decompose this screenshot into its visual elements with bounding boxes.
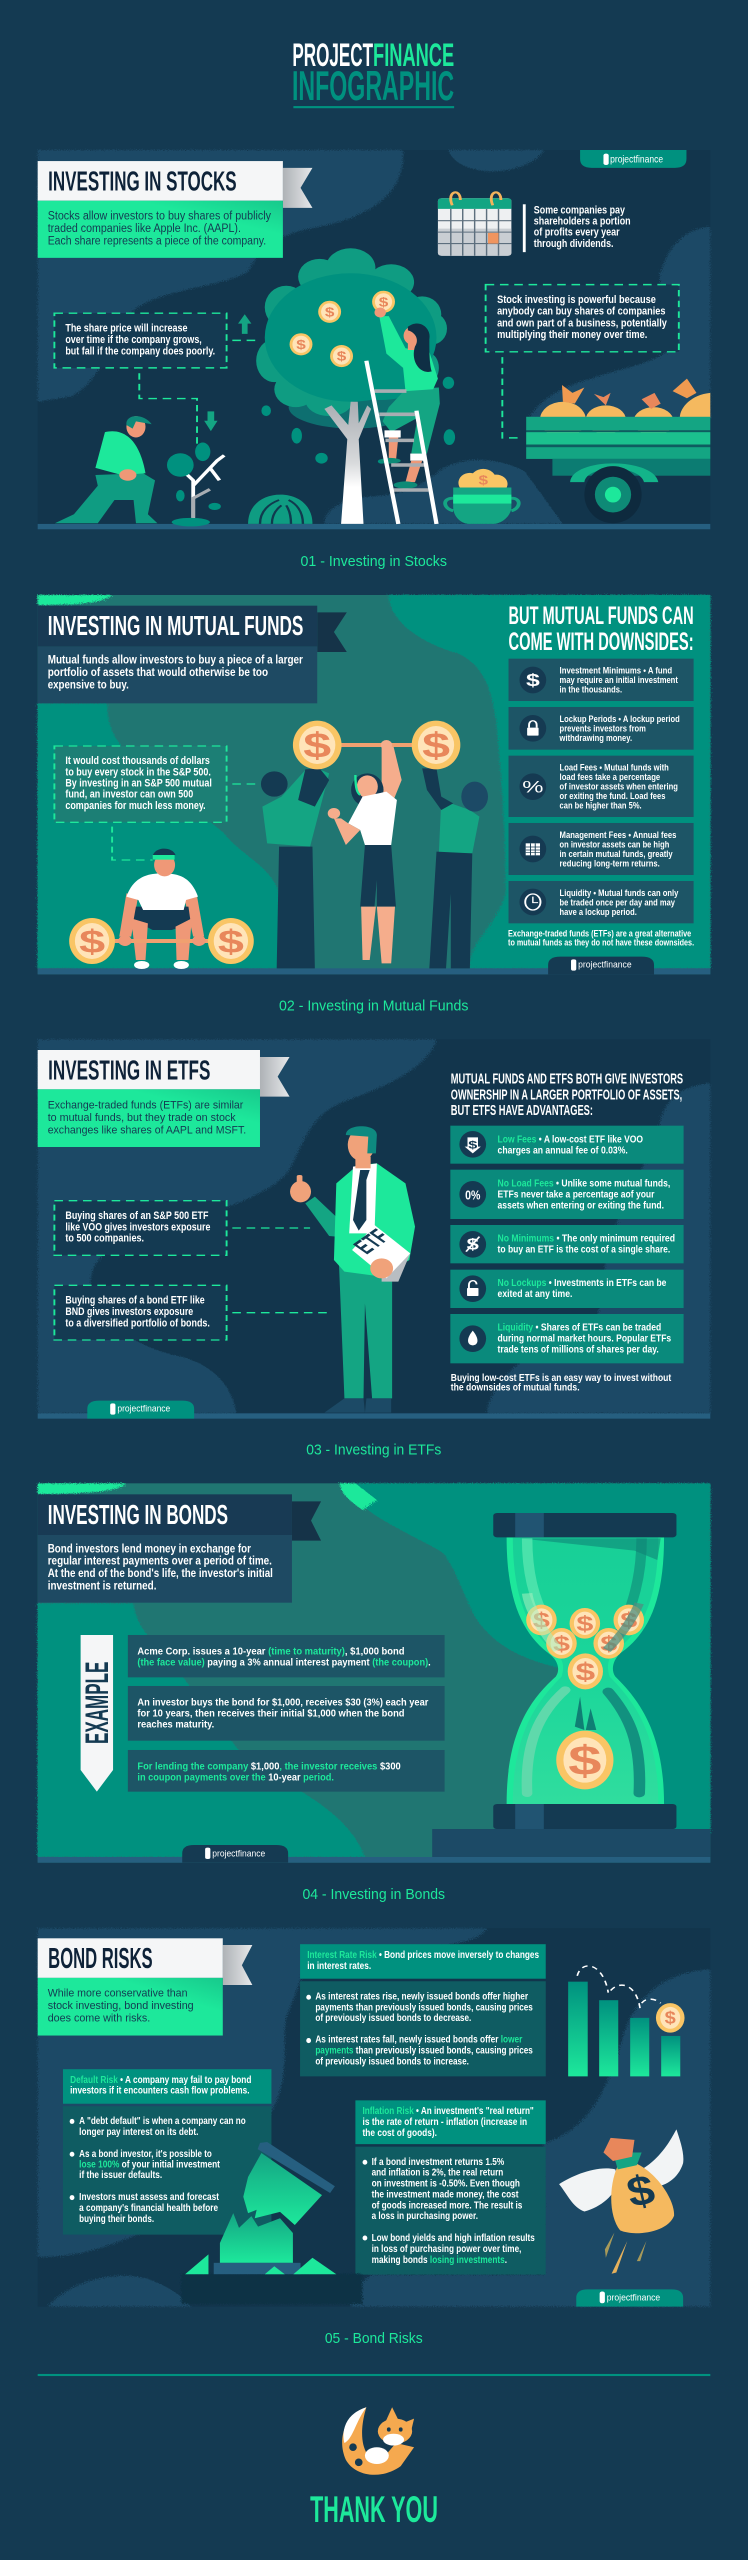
card: liquidity <box>509 881 694 923</box>
header title <box>292 38 454 109</box>
card: investment minimums: $ <box>526 671 540 690</box>
card: no lockups: exited at any time. <box>498 1287 572 1299</box>
dividends note: through dividends. <box>534 238 613 250</box>
example card 2: reaches maturity. <box>137 1718 214 1730</box>
intro text box: Exchange-traded funds (ETFs) are similar <box>48 1098 244 1111</box>
callout: cost: fund, an investor can own 500 <box>65 788 193 800</box>
weightlifter: $ <box>79 923 105 960</box>
ETF note <box>508 929 694 948</box>
intro text box: Each share represents a piece of the company. <box>48 234 266 247</box>
card: interest rate risk: As interest rates rise, newly issued bonds offer higher <box>315 1992 528 2002</box>
card: lockup periods: prevents investors from <box>560 724 646 734</box>
tree <box>256 248 447 524</box>
card: inflation risk <box>355 2100 546 2275</box>
title ribbon <box>38 161 312 208</box>
card: interest rate risk: of previously issued bonds to increase. <box>315 2057 469 2067</box>
callout: cost: It would cost thousands of dollars <box>65 754 210 766</box>
ETF folder: ETF <box>348 1225 396 1258</box>
weightlifter <box>69 849 254 969</box>
callout: share price: over time if the company grows, <box>65 334 202 345</box>
callout: S&P ETF: like VOO gives investors exposure <box>65 1221 211 1233</box>
logo tab <box>182 1845 288 1863</box>
card: management fees: on investor assets can be high <box>560 840 669 850</box>
intro text box: to mutual funds, but they trade on stock <box>48 1110 236 1123</box>
dividends note <box>523 204 631 252</box>
flying money bag <box>559 2129 683 2274</box>
card: inflation risk: Inflation Risk • An investment's "real return" <box>363 2107 534 2117</box>
card: load fees: load fees take a percentage <box>560 773 660 782</box>
title ribbon <box>38 1938 252 1985</box>
card: inflation risk: If a bond investment returns 1.5% <box>372 2157 504 2168</box>
callout: cost: to buy every stock in the S&P 500. <box>65 766 211 778</box>
card: default risk: investors if it encounters cash flow problems. <box>70 2086 250 2096</box>
card: default risk: Investors must assess and forecast <box>79 2193 219 2203</box>
caption 05: 05 - Bond Risks <box>325 2331 423 2347</box>
three people lifting: $ <box>303 727 331 765</box>
caption 02: 02 - Investing in Mutual Funds <box>279 997 469 1014</box>
three people lifting <box>261 721 488 968</box>
intro text box <box>38 201 283 258</box>
truck <box>526 417 710 523</box>
arrow up <box>238 314 251 334</box>
caption 04: 04 - Investing in Bonds <box>302 1886 445 1902</box>
coins on tree: $ <box>296 338 306 352</box>
card: investment minimums <box>509 659 694 701</box>
card: management fees: in certain mutual funds, greatly <box>560 850 673 859</box>
card: interest rate risk: As interest rates fall, newly issued bonds offer lower <box>315 2035 522 2045</box>
card: load fees: % <box>522 778 543 796</box>
example card 1 <box>128 1635 445 1677</box>
intro text box: investment is returned. <box>48 1580 156 1593</box>
card: load fees: can be higher than 5%. <box>560 801 642 811</box>
weightlifter: $ <box>218 923 244 960</box>
title ribbon <box>38 1494 321 1541</box>
example card 2 <box>128 1686 445 1741</box>
card: investment minimums: in the thousands. <box>560 685 622 695</box>
dying tree <box>167 442 224 526</box>
card: default risk <box>63 2069 271 2235</box>
example card 1: Acme Corp. issues a 10-year (time to maturity), $1,000 bond <box>137 1645 405 1657</box>
callout: S&P ETF <box>54 1201 310 1255</box>
money bags <box>540 379 710 437</box>
card: liquidity: Liquidity • Shares of ETFs can be traded <box>498 1321 661 1333</box>
card: no load fees: 0% <box>465 1188 481 1203</box>
hourglass: $ <box>568 1737 601 1784</box>
callout: S&P ETF: Buying shares of an S&P 500 ETF <box>65 1209 208 1221</box>
intro text box: exchanges like shares of AAPL and MSFT. <box>48 1123 246 1136</box>
caption 01: 01 - Investing in Stocks <box>301 553 447 569</box>
card: interest rate risk: of previously issued bonds to decrease. <box>315 2014 471 2024</box>
arrow down <box>204 411 218 431</box>
card: low fees <box>450 1126 684 1164</box>
card: inflation risk: on investment is -0.50%. Even though <box>372 2179 520 2189</box>
heading: downsides <box>509 602 694 656</box>
coins on tree <box>290 291 395 367</box>
card: no lockups <box>450 1270 684 1308</box>
caption 03: 03 - Investing in ETFs <box>306 1442 441 1458</box>
leaves <box>261 377 455 464</box>
example arrow: EXAMPLE <box>79 1662 115 1744</box>
card: inflation risk: and inflation is 2%, the real return <box>372 2168 503 2179</box>
logo tab <box>548 957 654 974</box>
bush <box>248 495 312 524</box>
dividends note: Some companies pay <box>534 204 625 216</box>
callout: S&P ETF: to 500 companies. <box>65 1232 144 1244</box>
card: no minimums: $ <box>467 1237 479 1254</box>
panel: bond risks <box>38 1928 710 2531</box>
card: default risk: a company's financial health before <box>79 2204 218 2214</box>
card: interest rate risk: payments than previously issued bonds, causing prices <box>315 2046 533 2056</box>
hourglass: $ <box>600 1632 618 1656</box>
coins on tree: $ <box>379 295 389 310</box>
intro text box: Bond investors lend money in exchange for <box>48 1543 251 1556</box>
intro text box: At the end of the bond's life, the investor's initial <box>48 1567 273 1580</box>
falling bar chart: $ <box>665 2009 676 2028</box>
example card 2: for 10 years, then receives their initial $1,000 when the bond <box>137 1707 405 1719</box>
card: no load fees <box>450 1170 684 1219</box>
logo tab <box>580 150 686 168</box>
card: investment minimums: Investment Minimums • A fund <box>560 666 672 676</box>
card: load fees: or exiting the fund. Load fees <box>560 792 665 801</box>
coins on tree: $ <box>325 305 335 320</box>
coins on tree: $ <box>337 350 347 364</box>
card: interest rate risk: in interest rates. <box>307 1962 371 1972</box>
hourglass: $ <box>533 1608 550 1633</box>
callout: powerful <box>486 285 679 438</box>
card: inflation risk: in loss of purchasing power over time, <box>372 2244 522 2255</box>
flying money bag: $ <box>622 2165 659 2217</box>
card: low fees: Low Fees • A low-cost ETF like VOO <box>498 1133 643 1145</box>
callout: bond ETF: to a diversified portfolio of bonds. <box>65 1317 210 1329</box>
example card 3: For lending the company $1,000, the investor receives $300 <box>137 1760 401 1772</box>
three people lifting: $ <box>422 727 450 765</box>
card: no lockups: No Lockups • Investments in ETFs can be <box>498 1276 666 1288</box>
callout: cost: companies for much less money. <box>65 799 206 811</box>
intro text box: portfolio of assets that would otherwise be too <box>48 666 268 679</box>
panel: mutual funds <box>38 595 710 1014</box>
heading: advantages <box>451 1070 683 1118</box>
card: default risk: A "debt default" is when a company can no <box>79 2116 246 2127</box>
card: default risk: As a bond investor, it's possible to <box>79 2149 212 2160</box>
woman on ladder <box>374 307 440 489</box>
falling bar chart <box>568 1966 685 2076</box>
example arrow <box>79 1635 115 1792</box>
callout: cost: By investing in an S&P 500 mutual <box>65 777 212 789</box>
fox mascot <box>342 2407 414 2475</box>
intro text box <box>38 1978 223 2036</box>
title ribbon: INVESTING IN ETFS <box>48 1055 210 1086</box>
card: liquidity <box>450 1314 684 1363</box>
title ribbon: INVESTING IN MUTUAL FUNDS <box>48 611 303 641</box>
callout: powerful: Stock investing is powerful because <box>497 294 656 305</box>
panel: ETFs <box>38 1039 710 1458</box>
intro text box <box>38 1535 292 1603</box>
pot of coins <box>445 469 519 524</box>
text: INFOGRAPHIC <box>292 62 454 109</box>
businessman <box>290 1126 415 1413</box>
callout: bond ETF <box>54 1285 329 1340</box>
card: low fees: charges an annual fee of 0.03%. <box>498 1144 628 1156</box>
hourglass <box>432 1513 710 1857</box>
card: inflation risk: the investment made money, the cost <box>372 2190 519 2200</box>
hourglass: $ <box>576 1612 594 1636</box>
card: lockup periods: withdrawing money. <box>559 734 632 743</box>
card: lockup periods <box>509 707 694 750</box>
ETF folder <box>348 1225 410 1282</box>
example card 1: (the face value) paying a 3% annual interest payment (the coupon). <box>137 1656 431 1668</box>
intro text box <box>38 647 317 703</box>
broken hourglass <box>181 2142 363 2304</box>
logo tab <box>87 1401 194 1419</box>
card: inflation risk: the cost of goods). <box>363 2129 437 2139</box>
panel: investing in stocks <box>38 150 710 529</box>
card: interest rate risk: Interest Rate Risk • Bond prices move inversely to changes <box>307 1951 539 1961</box>
intro text box: Stocks allow investors to buy shares of publicly <box>48 208 271 222</box>
title ribbon <box>38 606 347 652</box>
callout: share price: The share price will increase <box>65 322 187 334</box>
card: default risk: buying their bonds. <box>79 2215 154 2225</box>
text: FINANCE <box>373 38 454 74</box>
hourglass: $ <box>620 1608 638 1633</box>
logo tab: projectfinance <box>610 154 663 165</box>
logo tab: projectfinance <box>117 1404 170 1414</box>
hourglass: $ <box>553 1632 570 1656</box>
header title: PROJECT <box>292 38 373 74</box>
logo tab: projectfinance <box>578 960 632 970</box>
intro text box: does come with risks. <box>48 2011 150 2024</box>
callout: share price: but fall if the company does poorly. <box>65 345 215 357</box>
card: inflation risk: of goods increased more. The result is <box>372 2201 523 2211</box>
callout: bond ETF: BND gives investors exposure <box>65 1305 193 1317</box>
card: liquidity: have a lockup period. <box>560 908 637 917</box>
intro text box: While more conservative than <box>48 1986 187 1999</box>
dividends note: of profits every year <box>534 226 620 238</box>
card: load fees <box>509 756 694 817</box>
intro text box: Mutual funds allow investors to buy a piece of a larger <box>48 654 303 667</box>
title ribbon <box>38 1050 290 1097</box>
thank you: THANK YOU <box>310 2489 438 2531</box>
logo tab: projectfinance <box>212 1849 265 1859</box>
kneeling man <box>55 416 157 523</box>
closing note: the downsides of mutual funds. <box>451 1382 580 1393</box>
intro text box: traded companies like Apple Inc. (AAPL). <box>48 221 241 235</box>
intro text box: expensive to buy. <box>48 679 129 692</box>
example card 2: An investor buys the bond for $1,000, receives $30 (3%) each year <box>137 1696 428 1708</box>
pot of coins: $ <box>478 473 489 488</box>
icon: calendar <box>438 192 511 256</box>
intro text box: regular interest payments over a period of time. <box>48 1555 272 1568</box>
card: interest rate risk <box>300 1944 546 2076</box>
card: inflation risk: making bonds losing investments. <box>372 2255 507 2266</box>
example card 3: in coupon payments over the 10-year period. <box>137 1771 334 1783</box>
card: default risk: if the issuer defaults. <box>79 2171 162 2181</box>
intro text box: stock investing, bond investing <box>48 1999 194 2012</box>
dividends note: shareholders a portion <box>534 215 631 227</box>
card: inflation risk: Low bond yields and high inflation results <box>372 2233 535 2244</box>
card: low fees: $ <box>468 1138 478 1151</box>
card: no load fees: No Load Fees • Unlike some mutual funds, <box>498 1177 670 1189</box>
card: default risk: Default Risk • A company may fail to pay bond <box>70 2076 251 2086</box>
callout: cost <box>54 746 258 860</box>
card: default risk: lose 100% of your initial investment <box>79 2160 220 2170</box>
hourglass: $ <box>576 1658 595 1686</box>
logo tab: projectfinance <box>607 2293 660 2304</box>
card: inflation risk: is the rate of return - inflation (increase in <box>363 2118 527 2128</box>
logo tab <box>576 2289 683 2307</box>
callout: powerful: multiplying their money over time. <box>497 329 647 340</box>
card: default risk: longer pay interest on its debt. <box>79 2127 199 2138</box>
card: interest rate risk: payments than previously issued bonds, causing prices <box>315 2003 533 2013</box>
title ribbon: BOND RISKS <box>48 1943 153 1974</box>
example card 3 <box>128 1750 445 1792</box>
closing note <box>451 1372 671 1393</box>
callout: share price <box>54 313 260 446</box>
callout: bond ETF: Buying shares of a bond ETF like <box>65 1294 205 1306</box>
card: load fees: Load Fees • Mutual funds with <box>560 763 669 773</box>
intro text box <box>38 1089 260 1147</box>
card: management fees <box>509 823 694 875</box>
panel: bonds <box>38 1483 710 1902</box>
card: management fees: reducing long-term returns. <box>560 859 660 869</box>
ladder <box>366 361 436 524</box>
title ribbon: INVESTING IN BONDS <box>48 1500 228 1530</box>
card: inflation risk: a loss in purchasing power. <box>372 2212 478 2222</box>
title ribbon: INVESTING IN STOCKS <box>48 165 237 196</box>
card: no minimums <box>450 1225 684 1263</box>
